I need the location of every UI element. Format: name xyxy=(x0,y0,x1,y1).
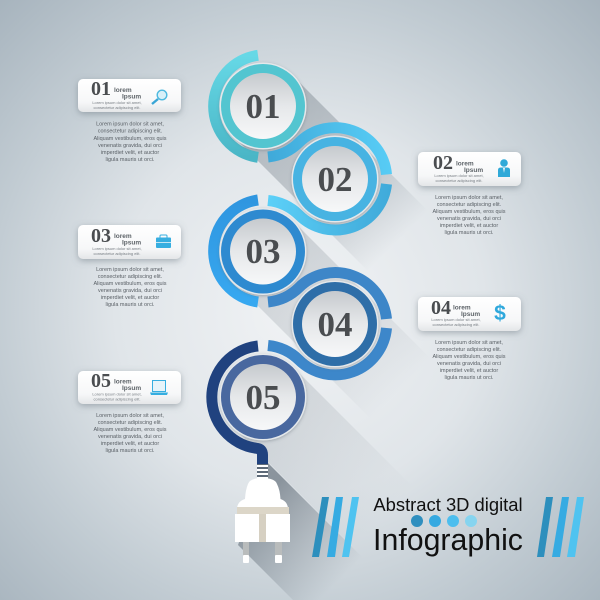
card heading 04: lorem xyxy=(453,304,471,312)
panel: ring 05 xyxy=(212,346,306,464)
callout 02 xyxy=(418,152,521,236)
body text 05: Aliquam vestibulum, eros quis xyxy=(93,427,167,433)
icon: person xyxy=(498,159,510,177)
card 04 xyxy=(418,297,521,331)
body text 04: imperdiet velit, et auctor xyxy=(440,368,498,374)
body text 01: ligula mauris ut orci. xyxy=(106,157,155,163)
ring 02 xyxy=(292,136,378,222)
callout 03 xyxy=(78,225,181,308)
body text 02: imperdiet velit, et auctor xyxy=(440,223,498,229)
panel: ring 01 xyxy=(214,55,306,157)
body text 01: consectetur adipiscing elit. xyxy=(98,128,163,134)
card heading 01: Ipsum xyxy=(122,94,141,100)
card caption 02: Lorem ipsum dolor sit amet, xyxy=(434,173,484,178)
card heading 02: lorem xyxy=(456,160,474,168)
card heading 05: Ipsum xyxy=(122,385,141,392)
card caption 05: consectetur adipiscing elit. xyxy=(94,396,140,402)
card caption 04 xyxy=(431,317,481,327)
card heading 05 xyxy=(91,370,141,392)
card 03 xyxy=(78,225,181,259)
card heading 04: Ipsum xyxy=(461,311,480,318)
body text 03: imperdiet velit, et auctor xyxy=(101,295,159,301)
card heading 01: 01 xyxy=(91,78,111,100)
body text 05: Lorem ipsum dolor sit amet, xyxy=(96,413,164,419)
card heading 02 xyxy=(433,152,483,174)
number 02: 02 xyxy=(318,160,352,199)
card caption 01: consectetur adipiscing elit. xyxy=(94,105,140,110)
panel: ring 04 xyxy=(268,273,386,375)
card caption 01 xyxy=(92,100,142,110)
body text 02: ligula mauris ut orci. xyxy=(445,230,494,236)
card heading 02: Ipsum xyxy=(464,167,483,174)
dots xyxy=(411,515,477,527)
body text 02: consectetur adipiscing elit. xyxy=(437,202,502,208)
body text 05 xyxy=(93,413,167,454)
body text 01: venenatis gravida, dui orci xyxy=(98,143,162,149)
card heading 02: 02 xyxy=(433,152,453,174)
number 04: 04 xyxy=(318,305,352,344)
left slashes xyxy=(312,497,359,557)
body text 03: consectetur adipiscing elit. xyxy=(98,274,163,280)
body text 05: consectetur adipiscing elit. xyxy=(98,420,163,426)
card caption 03 xyxy=(92,246,142,256)
title: Abstract 3D digital: Abstract 3D digital xyxy=(373,494,523,515)
connector arc 03 to 04 xyxy=(268,273,386,319)
callout 04 xyxy=(418,297,521,381)
body text 05: ligula mauris ut orci. xyxy=(106,448,155,454)
body text 04 xyxy=(432,340,506,381)
title: Infographic: Infographic xyxy=(373,524,523,557)
ring 03 xyxy=(220,208,306,295)
number 03: 03 xyxy=(246,232,280,271)
long shadows xyxy=(233,76,461,600)
connector arc 04 to 05 xyxy=(268,328,386,375)
body text 05: venenatis gravida, dui orci xyxy=(98,434,162,440)
icon: dollar: $ xyxy=(494,302,506,325)
callout 01 xyxy=(78,78,181,163)
card caption 05 xyxy=(92,392,142,402)
card heading 03: 03 xyxy=(91,225,111,247)
body text 01: Aliquam vestibulum, eros quis xyxy=(93,136,167,142)
card heading 05: 05 xyxy=(91,370,111,392)
body text 02: Lorem ipsum dolor sit amet, xyxy=(435,195,503,201)
card caption 04: consectetur adipiscing elit. xyxy=(433,322,479,327)
body text 01 xyxy=(93,122,167,163)
card heading 03 xyxy=(91,225,141,247)
right slashes xyxy=(537,497,584,557)
outer arc 03 xyxy=(214,200,258,302)
connector arc 01 to 02 xyxy=(268,128,386,174)
icon: power plug xyxy=(235,464,290,563)
card caption 01: Lorem ipsum dolor sit amet, xyxy=(92,100,142,105)
card heading 03: Ipsum xyxy=(122,240,141,246)
card heading 04: 04 xyxy=(431,297,451,319)
card 05 xyxy=(78,371,181,404)
panel: ring 02 xyxy=(268,128,386,230)
card caption 04: Lorem ipsum dolor sit amet, xyxy=(431,317,481,322)
card heading 03: lorem xyxy=(114,233,132,240)
body text 04: ligula mauris ut orci. xyxy=(445,375,494,381)
body text 03 xyxy=(93,267,167,308)
card caption 02: consectetur adipiscing elit. xyxy=(436,178,482,183)
panel: ring 03 xyxy=(214,200,306,302)
card heading 04 xyxy=(431,297,480,319)
icon: magnifier xyxy=(152,90,167,104)
card caption 05: Lorem ipsum dolor sit amet, xyxy=(92,392,142,396)
card heading 01 xyxy=(91,78,141,100)
body text 03: venenatis gravida, dui orci xyxy=(98,288,162,294)
card caption 03: consectetur adipiscing elit. xyxy=(94,251,140,256)
number 01: 01 xyxy=(246,87,280,126)
body text 03: ligula mauris ut orci. xyxy=(106,302,155,308)
number 05: 05 xyxy=(246,378,280,417)
body text 03: Lorem ipsum dolor sit amet, xyxy=(96,267,164,273)
body text 04: Lorem ipsum dolor sit amet, xyxy=(435,340,503,346)
card heading 01: lorem xyxy=(114,87,132,94)
card caption 02 xyxy=(434,173,484,183)
outer arc 05 with cord xyxy=(212,346,262,464)
body text 01: imperdiet velit, et auctor xyxy=(101,150,159,156)
body text 04: consectetur adipiscing elit. xyxy=(437,347,502,353)
body text 03: Aliquam vestibulum, eros quis xyxy=(93,281,167,287)
ring 01 xyxy=(220,62,306,150)
callout 05 xyxy=(78,370,181,454)
card 01 xyxy=(78,79,181,112)
body text 01: Lorem ipsum dolor sit amet, xyxy=(96,122,164,128)
body text 02: Aliquam vestibulum, eros quis xyxy=(432,209,506,215)
card 02 xyxy=(418,152,521,186)
card caption 03: Lorem ipsum dolor sit amet, xyxy=(92,246,142,251)
connector arc 02 to 03 xyxy=(268,184,386,230)
outer arc 01 xyxy=(214,55,258,157)
body text 02 xyxy=(432,195,506,236)
body text 04: Aliquam vestibulum, eros quis xyxy=(432,354,506,360)
ring 04 xyxy=(292,280,378,368)
card heading 05: lorem xyxy=(114,378,132,386)
ring 05 xyxy=(220,354,306,440)
body text 05: imperdiet velit, et auctor xyxy=(101,441,159,447)
body text 04: venenatis gravida, dui orci xyxy=(437,361,501,367)
body text 02: venenatis gravida, dui orci xyxy=(437,216,501,222)
icon: laptop xyxy=(150,380,168,395)
icon: briefcase xyxy=(156,235,171,248)
